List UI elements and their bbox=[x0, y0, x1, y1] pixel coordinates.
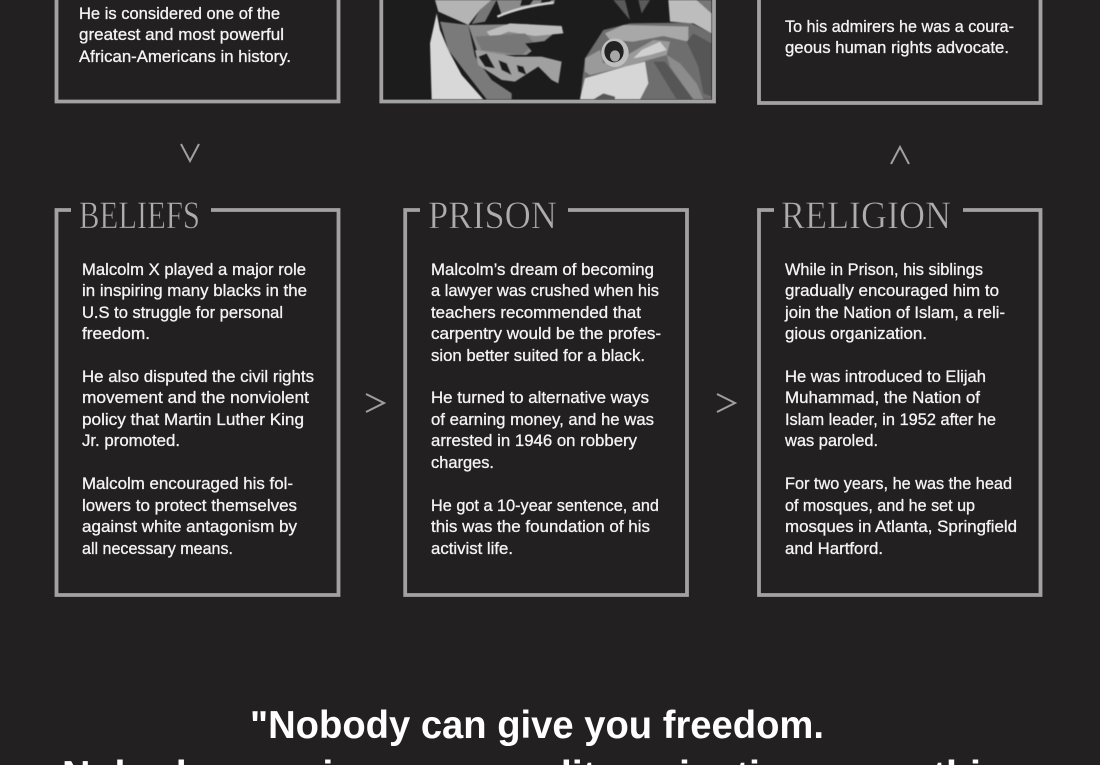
text: prison: arrested in 1946 on robbery bbox=[431, 431, 637, 450]
text: prison: activist life. bbox=[431, 539, 513, 558]
ring bbox=[601, 38, 629, 67]
text: religion: was paroled. bbox=[784, 431, 878, 450]
text: legacy: greatest and most powerful bbox=[79, 25, 284, 44]
text: beliefs: against white antagonism by bbox=[82, 517, 297, 536]
heading: beliefs: BELIEFS bbox=[79, 194, 200, 237]
text: legacy: African-Americans in history. bbox=[79, 47, 291, 66]
text: prison: sion better suited for a black. bbox=[431, 346, 645, 365]
hand bbox=[580, 0, 712, 99]
text: prison: charges. bbox=[431, 453, 494, 472]
text: religion: gradually encouraged him to bbox=[785, 281, 999, 300]
text: religion: While in Prison, his siblings bbox=[785, 260, 983, 279]
text: religion: mosques in Atlanta, Springfield bbox=[785, 517, 1017, 536]
text: religion: For two years, he was the head bbox=[785, 474, 1012, 493]
arrow: right 1 bbox=[366, 394, 384, 412]
text: beliefs: all necessary means. bbox=[82, 539, 233, 558]
cheek and neck bbox=[430, 0, 512, 99]
text: prison: a lawyer was crushed when his bbox=[431, 281, 659, 300]
text: religion: gious organization. bbox=[785, 324, 927, 343]
quote bbox=[62, 704, 1040, 765]
text: beliefs: freedom. bbox=[82, 324, 150, 343]
text: religion: Islam leader, in 1952 after he bbox=[785, 410, 996, 429]
text: beliefs: movement and the nonviolent bbox=[82, 388, 309, 407]
text: legacy: He is considered one of the bbox=[79, 4, 280, 23]
text: beliefs: policy that Martin Luther King bbox=[82, 410, 304, 429]
portrait photo bbox=[381, 0, 714, 102]
beard and mouth bbox=[468, 0, 563, 83]
text: prison: teachers recommended that bbox=[431, 303, 641, 322]
arrow: right 2 bbox=[717, 394, 735, 412]
text: prison: Malcolm’s dream of becoming bbox=[431, 260, 654, 279]
text: admirers: geous human rights advocate. bbox=[785, 38, 1009, 57]
heading: prison: PRISON bbox=[428, 194, 557, 237]
panel: prison bbox=[405, 194, 687, 595]
text: religion: and Hartford. bbox=[785, 539, 883, 558]
arrow: up bbox=[891, 147, 909, 164]
text: beliefs: Jr. promoted. bbox=[82, 431, 180, 450]
quote: "Nobody can give you freedom. bbox=[250, 704, 824, 747]
text: religion: Muhammad, the Nation of bbox=[785, 388, 980, 407]
text: prison: of earning money, and he was bbox=[431, 410, 654, 429]
panel: legacy bbox=[56, 0, 338, 102]
text: religion: He was introduced to Elijah bbox=[785, 367, 986, 386]
panel: religion bbox=[759, 194, 1040, 595]
arrow: down bbox=[181, 144, 199, 161]
text: prison: He turned to alternative ways bbox=[431, 388, 649, 407]
text: beliefs: in inspiring many blacks in the bbox=[82, 281, 307, 300]
panel: beliefs bbox=[56, 194, 338, 595]
heading: religion: RELIGION bbox=[781, 194, 951, 237]
text: beliefs: Malcolm X played a major role bbox=[82, 260, 306, 279]
text: beliefs bbox=[82, 260, 314, 558]
text: legacy bbox=[79, 4, 291, 66]
text: beliefs: lowers to protect themselves bbox=[82, 496, 297, 515]
text: religion: join the Nation of Islam, a reli- bbox=[784, 303, 1005, 322]
panel: admirers bbox=[759, 0, 1040, 103]
text: prison bbox=[431, 260, 661, 558]
text: admirers: To his admirers he was a coura- bbox=[785, 17, 1014, 36]
text: religion bbox=[784, 260, 1017, 558]
text: admirers bbox=[785, 17, 1014, 57]
text: beliefs: Malcolm encouraged his fol- bbox=[82, 474, 293, 493]
text: beliefs: U.S to struggle for personal bbox=[82, 303, 283, 322]
text: beliefs: He also disputed the civil rights bbox=[82, 367, 314, 386]
text: prison: carpentry would be the profes- bbox=[431, 324, 661, 343]
text: prison: He got a 10-year sentence, and bbox=[431, 496, 659, 515]
text: prison: this was the foundation of his bbox=[431, 517, 650, 536]
text: religion: of mosques, and he set up bbox=[785, 496, 975, 515]
